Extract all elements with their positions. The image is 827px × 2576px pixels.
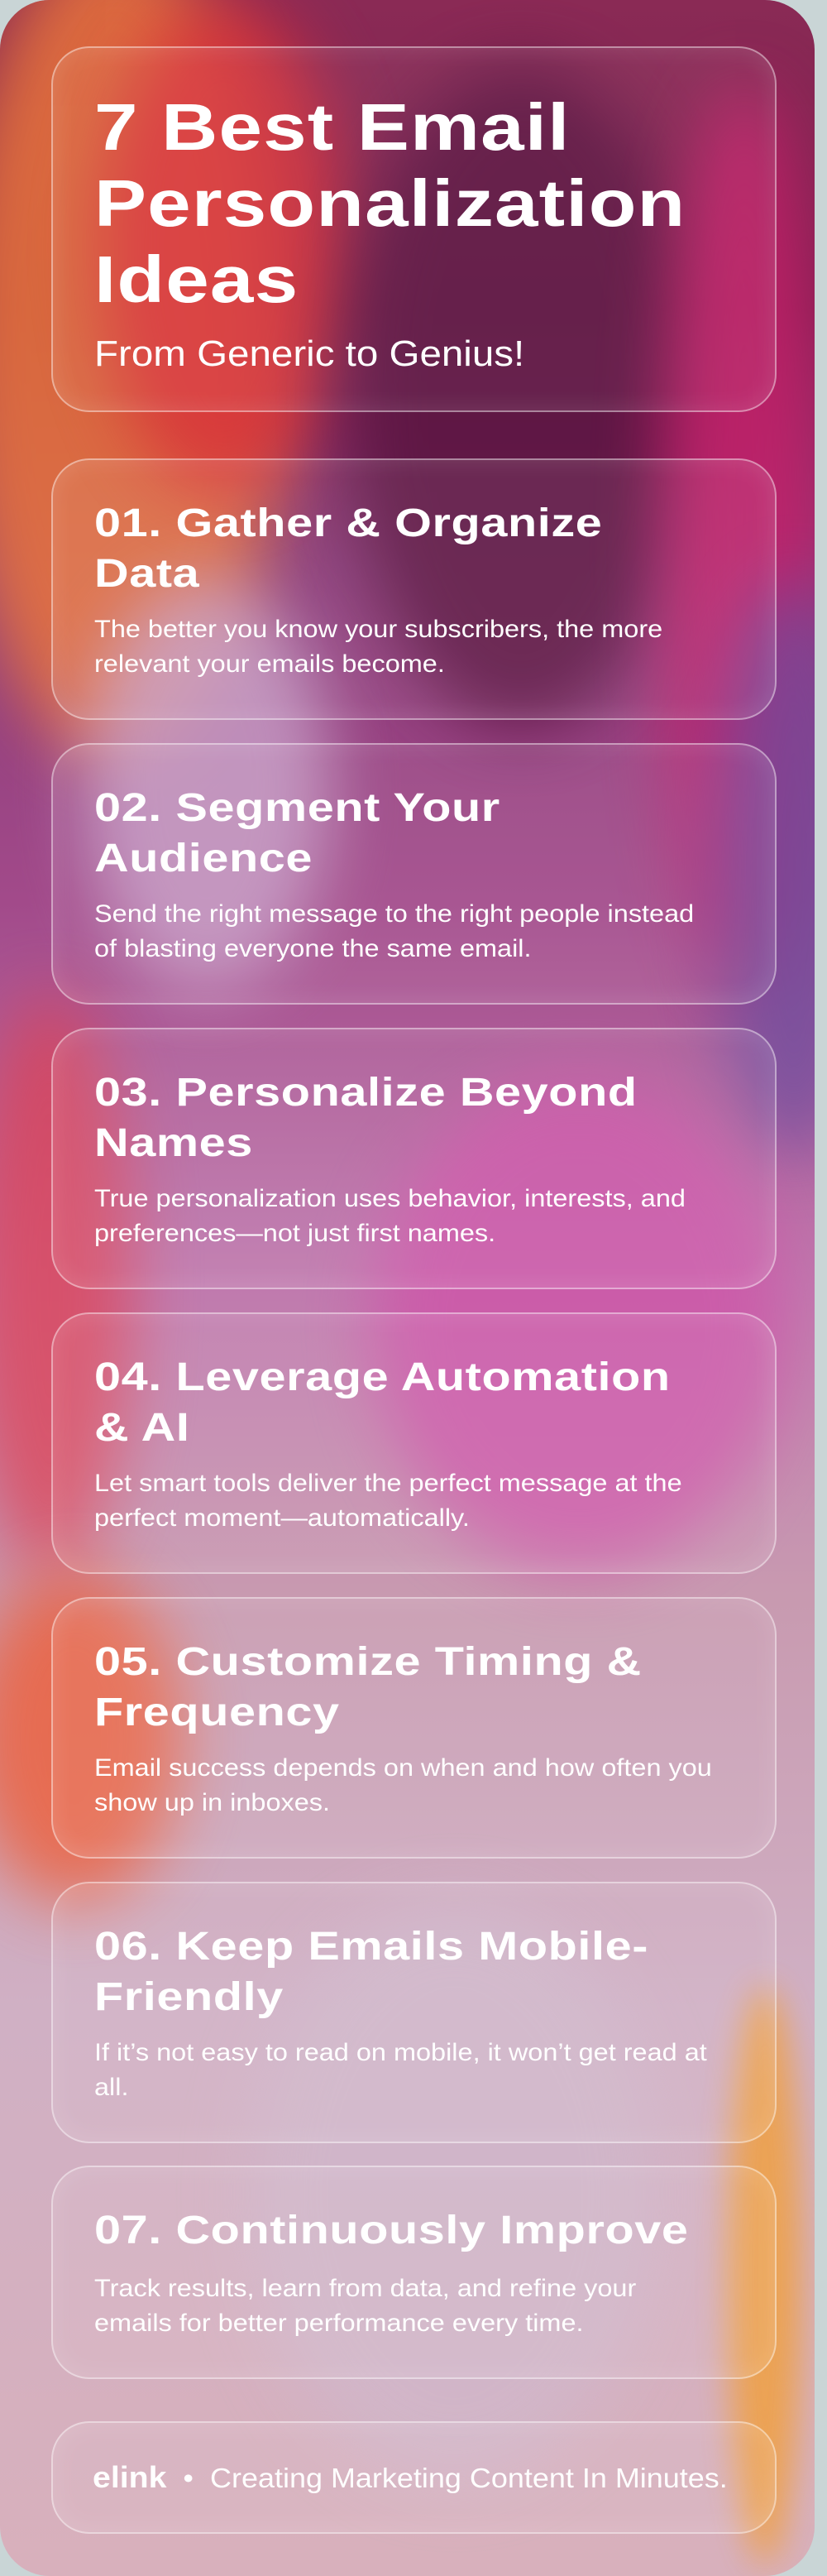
title: Personalization [94,166,686,240]
heading 06: Friendly [94,1975,284,2019]
text 02 [94,900,694,962]
text 01: relevant your emails become. [94,650,445,678]
heading 01 [94,501,602,596]
heading 01: Data [94,552,199,596]
panel: 05 [51,1597,777,1859]
text 03 [94,1185,686,1247]
text 06: all. [94,2074,128,2101]
heading 05 [94,1640,642,1734]
heading 05: 05. Customize Timing & [94,1640,642,1684]
text 01 [94,616,662,678]
heading 05: Frequency [94,1691,340,1734]
heading 02 [94,786,500,880]
heading 02: Audience [94,837,313,880]
title: 7 Best Email [94,90,571,164]
title: Ideas [94,242,299,316]
panel: 02 [51,743,777,1005]
heading 04: 04. Leverage Automation [94,1355,671,1399]
panel: 04 [51,1312,777,1574]
heading 04: & AI [94,1406,189,1450]
heading 03: 03. Personalize Beyond [94,1071,638,1115]
heading 07: 07. Continuously Improve [94,2209,689,2252]
text 04 [94,1470,682,1532]
text 06: If it’s not easy to read on mobile, it won’t get read at [94,2039,707,2066]
panel: 01 [51,458,777,720]
text 02: of blasting everyone the same email. [94,935,532,962]
text 03: preferences—not just first names. [94,1220,495,1247]
text 07 [94,2275,636,2337]
heading 06: 06. Keep Emails Mobile- [94,1925,648,1969]
panel: 07 [51,2166,777,2379]
text 05: show up in inboxes. [94,1789,330,1816]
panel: title [51,46,777,412]
heading 04 [94,1355,671,1450]
text 04: perfect moment—automatically. [94,1504,470,1532]
text 01: The better you know your subscribers, the more [94,616,662,643]
text 02: Send the right message to the right people instead [94,900,694,928]
text 05: Email success depends on when and how often you [94,1754,712,1782]
heading 06 [94,1925,648,2019]
text 07: emails for better performance every time. [94,2310,584,2337]
text 04: Let smart tools deliver the perfect message at the [94,1470,682,1497]
footer [51,2421,777,2534]
panel: 06 [51,1882,777,2143]
heading 02: 02. Segment Your [94,786,500,830]
heading 03: Names [94,1121,253,1165]
footer text: elink • Creating Marketing Content In Minutes. [93,2460,728,2494]
title [94,90,686,316]
text 06 [94,2039,707,2101]
panel: 03 [51,1028,777,1289]
heading 01: 01. Gather & Organize [94,501,602,545]
heading 03 [94,1071,638,1165]
subtitle: From Generic to Genius! [94,333,524,374]
text 07: Track results, learn from data, and refine your [94,2275,636,2302]
text 03: True personalization uses behavior, interests, and [94,1185,686,1212]
text 05 [94,1754,712,1816]
